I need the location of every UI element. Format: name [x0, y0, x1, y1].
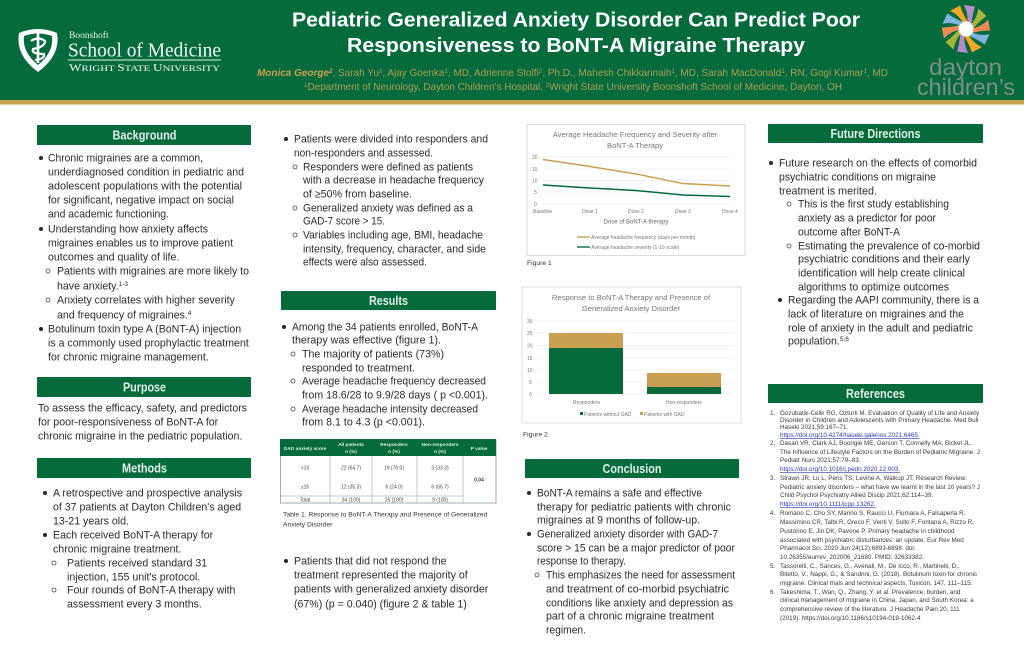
table 1: 6 (24.0)	[385, 484, 403, 490]
authors and affiliations: Wright State University Boonshoft School of Medicine, Dayton, OH	[549, 82, 842, 93]
text block: conclusion bullets: score > 15 can be a major predictor of poor	[537, 542, 735, 554]
chart: response stacked bar chart: 0	[529, 392, 532, 398]
table 1: 12 (35.3)	[341, 484, 361, 490]
text block: reference list: Tassorelli, C., Sances, G., Avenali, M., De Icco, R., Martinelli, D.,	[780, 563, 960, 570]
text block: reference list: Pediatric anxiety disorders – what have we learnt in the last 10 years? J	[780, 484, 980, 491]
text block: study design bullets: Generalized anxiety was defined as a	[303, 202, 473, 214]
text block: results bullets: from 8.1 to 4.3 (p <0.001).	[302, 416, 425, 428]
authors and affiliations: 1	[863, 68, 867, 75]
text block: future directions bullets: role of anxiety in the adult and pediatric	[788, 322, 974, 334]
chart: headache frequency and severity line chart: Average Headache Frequency and Severity after	[553, 130, 718, 139]
heading: references: References	[846, 387, 905, 401]
chart: headache frequency and severity line chart: Average headache frequency (days per month)	[591, 235, 696, 241]
text block: results bullets	[282, 322, 488, 428]
text block: purpose: chronic migraine in the pediatric population.	[38, 430, 242, 442]
chart: headache frequency and severity line chart: 20	[532, 155, 538, 161]
chart: headache frequency and severity line chart	[527, 124, 745, 256]
chart: response stacked bar chart: 30	[527, 319, 533, 325]
text block: background bullets: Patients with migraines are more likely to	[57, 266, 249, 278]
authors and affiliations	[257, 68, 888, 93]
text block: reference list: migraine: Clinical trials and technical aspects. Toxicon, 147, 111–115.	[780, 580, 973, 587]
authors and affiliations: , MD, Adrienne Stolfi	[448, 68, 539, 79]
text block: future directions bullets: 5,6	[840, 336, 849, 343]
logo: Boonshoft School of Medicine	[18, 29, 221, 74]
authors and affiliations: 1	[444, 68, 448, 75]
text block: methods bullets: injection, 155 unit's protocol.	[67, 572, 200, 584]
authors and affiliations: Department of Neurology, Dayton Children's Hospital,	[308, 82, 546, 93]
text block: background bullets: migraines enables us to improve patient	[48, 238, 233, 250]
text block: reference list: Bitetto, V., Nappi, G., & Sandrini, G. (2018). Botulinum toxin for chronic	[780, 571, 977, 578]
text block: methods bullets	[43, 488, 242, 610]
text block: study design bullets: with a decrease in headache frequency	[302, 174, 485, 186]
chart: headache frequency and severity line chart: Dose of BoNT-A therapy	[604, 220, 668, 226]
text block: reference list	[770, 410, 980, 622]
text block: future directions bullets: Estimating the prevalence of co-morbid	[798, 240, 980, 252]
text block: reference list: 4.	[770, 510, 776, 517]
text block: background bullets: adolescent populations with the potential	[48, 180, 242, 192]
text block: purpose	[38, 402, 247, 442]
logo: Dayton Children's: dayton	[929, 54, 1002, 80]
logo: Boonshoft School of Medicine: W RIGHT STATE U NIVERSITY	[69, 63, 220, 74]
panel: conclusion	[525, 459, 739, 636]
icon: shield	[18, 29, 58, 72]
text block: background bullets	[39, 152, 249, 364]
table 1: 6 (66.7)	[431, 484, 449, 490]
text block: future directions bullets: Future research on the effects of comorbid	[779, 158, 977, 170]
text block: future directions bullets: outcome after BoNT-A	[798, 226, 901, 238]
text block: results bullets: Average headache frequency decreased	[302, 376, 486, 388]
authors and affiliations: , Sarah Yu	[333, 68, 379, 79]
text block: reference list: Strawn JR, Lu L, Peris TS, Levine A, Walkup JT. Research Review:	[780, 475, 967, 482]
text block: reference list: comprehensive review of the literature. J Headache Pain 20, 111	[780, 606, 960, 613]
title: Responsiveness to BoNT-A Migraine Therapy	[347, 34, 806, 57]
heading: future directions: Future Directions	[830, 127, 921, 141]
text block: background bullets: is a commonly used prophylactic treatment	[48, 338, 249, 350]
panel: purpose	[37, 377, 251, 442]
text block: reference list: Haseki 2021;59:167–71.	[780, 424, 849, 431]
authors and affiliations: , MD	[867, 68, 888, 79]
text block: study design bullets: Patients were divided into responders and	[294, 134, 488, 146]
panel: references	[768, 384, 983, 622]
heading: results	[281, 291, 496, 310]
chart: headache frequency and severity line chart: 15	[532, 167, 538, 173]
text block: background bullets: for significant, negative impact on social	[48, 194, 234, 206]
text block: conclusion bullets: response to therapy.	[537, 556, 626, 568]
text block: reference list: clinical management of migraine in China, Japan, and South Korea: a	[780, 597, 974, 604]
heading: conclusion	[525, 459, 739, 478]
logo: Boonshoft School of Medicine: School of Medicine	[68, 40, 221, 62]
table 1: 9 (100)	[432, 498, 448, 504]
chart: headache frequency and severity line chart: Dose 3	[675, 209, 691, 215]
text block: background bullets: Botulinum toxin type A (BoNT-A) injection	[48, 324, 241, 336]
authors and affiliations: , Ph.D., Mahesh Chikkannaih	[542, 68, 672, 79]
text block: reference list: associated with psychiatric disturbances: an update. Eur Rev Med	[780, 537, 964, 544]
text block: study design bullets: Responders were defined as patients	[303, 162, 473, 174]
chart: headache frequency and severity line chart: 5	[534, 190, 537, 196]
chart: response stacked bar chart: Patients with GAD	[644, 412, 685, 418]
text block: methods bullets: Patients received standard 31	[67, 558, 207, 570]
chart: response stacked bar chart: 10	[527, 368, 533, 374]
text block: reference list: 3.	[770, 475, 776, 482]
authors and affiliations: 2	[328, 68, 333, 75]
text block: non-responder finding: patients with generalized anxiety disorder	[294, 584, 489, 596]
text block: background bullets: Chronic migraines are a common,	[48, 152, 203, 164]
heading: results: Results	[369, 294, 408, 308]
text block: reference list: Child Psychol Psychiatry Allied Discip 2021;62:114–39.	[780, 492, 933, 499]
chart: headache frequency and severity line chart: Average headache severity (1-10 scale)	[591, 245, 680, 251]
chart: headache frequency and severity line chart: 10	[532, 178, 538, 184]
authors and affiliations: 2	[539, 68, 543, 75]
text block: study design bullets: GAD-7 score > 15.	[303, 216, 385, 228]
authors and affiliations: 1	[304, 82, 308, 89]
chart: response stacked bar chart: Responders	[573, 400, 600, 406]
text block: non-responder finding: (67%) (p = 0.040) (figure 2 & table 1)	[294, 598, 467, 610]
text block: reference list: 2.	[770, 440, 776, 447]
text block: reference list: 6.	[770, 589, 776, 596]
title: Pediatric Generalized Anxiety Disorder Can Predict Poor	[292, 8, 860, 32]
text block: methods bullets: A retrospective and prospective analysis	[53, 488, 242, 500]
text block: future directions bullets: anxiety as a predictor for poor	[798, 212, 936, 224]
text block: future directions bullets: identification will help create clinical	[798, 268, 965, 280]
text block: reference list: Massimino CR, Talbi R, Greco F, Venti V, Sullo F, Fontana A, Rizzo R,	[780, 519, 974, 526]
logo: Dayton Children's: children’s	[917, 74, 1015, 100]
text block: study design bullets: of ≥50% from baseline.	[303, 188, 412, 200]
heading: methods: Methods	[122, 462, 167, 476]
text block: reference list: https://doi.org/10.1111/jcpp.13262.	[780, 501, 876, 508]
text block: background bullets: 4	[188, 310, 192, 317]
text block: non-responder finding: treatment represented the majority of	[294, 570, 468, 582]
text block: results bullets: therapy was effective (figure 1).	[292, 334, 441, 346]
table 1: n (%)	[388, 449, 400, 455]
text block: future directions bullets: This is the first study establishing	[798, 198, 949, 210]
heading: purpose	[37, 377, 251, 397]
text block: future directions bullets	[769, 158, 980, 348]
text block: conclusion bullets: Generalized anxiety disorder with GAD-7	[537, 528, 718, 540]
panel: results	[280, 291, 496, 610]
authors and affiliations: 1	[781, 68, 785, 75]
table 1: 22 (64.7)	[341, 466, 361, 472]
table 1: 34 (100)	[342, 498, 361, 504]
chart: headache frequency and severity line chart: 0	[534, 202, 537, 208]
chart: headache frequency and severity line chart: Dose 1	[582, 209, 598, 215]
text block: future directions bullets: algorithms to optimize outcomes	[798, 282, 949, 294]
authors and affiliations: Monica George	[257, 68, 329, 79]
text block: methods bullets: Four rounds of BoNT-A therapy with	[67, 584, 236, 596]
text block: reference list: (2019). https://doi.org/10.1186/s10194-019-1062-4	[780, 615, 921, 622]
figure 1 caption: Figure 1	[527, 260, 552, 267]
chart: response stacked bar chart: Response to BoNT-A Therapy and Presence of	[552, 293, 711, 302]
text block: background bullets: have anxiety.	[57, 280, 119, 292]
chart: response stacked bar chart: 25	[527, 331, 533, 337]
text block: future directions bullets: Regarding the AAPI community, there is a	[788, 294, 979, 306]
authors and affiliations: 2	[546, 82, 550, 89]
text block: results bullets: The majority of patients (73%)	[302, 348, 444, 360]
table 1: GAD anxiety score	[284, 446, 327, 452]
text block: future directions bullets: population.	[788, 336, 840, 348]
text block: study design bullets	[284, 134, 488, 268]
panel: methods	[37, 458, 251, 610]
chart: headache frequency and severity line chart: Baseline	[533, 209, 552, 215]
panel: background	[37, 125, 251, 364]
text block: non-responder finding: Patients that did not respond the	[294, 556, 447, 568]
text block: reference list: 1.	[770, 410, 776, 417]
chart: response stacked bar chart: 15	[527, 356, 533, 362]
authors and affiliations: , Ajay Goenka	[382, 68, 445, 79]
figure 2 caption: Figure 2	[523, 432, 548, 438]
text block: conclusion bullets: This emphasizes the need for assessment	[546, 570, 735, 582]
table 1: Non-responders	[421, 442, 459, 448]
text block: methods bullets: of 37 patients at Dayton Children's aged	[53, 502, 241, 514]
text block: results bullets: responded to treatment.	[302, 362, 415, 374]
heading: purpose: Purpose	[123, 380, 166, 394]
table 1: Responders	[380, 442, 408, 448]
text block: study design bullets: non-responders and assessed.	[294, 148, 433, 160]
text block: future directions bullets: lack of literature on migraines and the	[788, 308, 964, 320]
table 1: <15	[301, 466, 309, 472]
text block: methods bullets: chronic migraine treatment.	[53, 544, 181, 556]
authors and affiliations: , MD, Sarah MacDonald	[675, 68, 782, 79]
text block: background bullets: outcomes and quality of life.	[48, 252, 179, 264]
table 1: ≥15	[301, 484, 309, 490]
authors and affiliations: , RN, Gogi Kumar	[785, 68, 864, 79]
table 1: Total	[300, 498, 310, 504]
text block: methods bullets: 13-21 years old.	[53, 516, 129, 528]
authors and affiliations: 2	[379, 68, 383, 75]
chart: headache frequency and severity line chart: Dose 2	[628, 209, 644, 215]
logo: Dayton Children's	[917, 1, 1015, 100]
text block: reference list: Pharmacol Sci. 2020 Jun;24(12):6893-6898. doi:	[780, 545, 916, 552]
table 1: 0.04	[474, 478, 484, 484]
text block: background bullets: 1-3	[119, 281, 128, 288]
text block: study design bullets: intensity, frequency, character, and side	[303, 244, 486, 256]
text block: non-responder finding	[284, 556, 489, 610]
icon: pinwheel	[939, 1, 993, 57]
table 1: 25 (100)	[385, 498, 404, 504]
table caption	[283, 512, 488, 528]
text block: future directions bullets: psychiatric conditions and their early	[798, 254, 971, 266]
chart: response stacked bar chart: 20	[527, 344, 533, 350]
table 1: n (%)	[345, 449, 357, 455]
text block: study design bullets: effects were also assessed.	[303, 256, 427, 268]
text block: reference list: Takeshima, T., Wan, Q., Zhang, Y. et al. Prevalence, burden, and	[780, 589, 961, 596]
table 1: P value	[471, 446, 488, 452]
text block: study design bullets: Variables including age, BMI, headache	[303, 230, 483, 242]
text block: reference list: 5.	[770, 563, 776, 570]
text block: conclusion bullets: regimen.	[546, 624, 586, 636]
table 1: All patients	[338, 442, 364, 448]
text block: conclusion bullets: therapy for pediatric patients with chronic	[537, 502, 732, 514]
text block: purpose: To assess the efficacy, safety, and predictors	[38, 402, 247, 414]
text block: future directions bullets: treatment is merited.	[779, 186, 877, 198]
text block: methods bullets: Each received BoNT-A therapy for	[53, 530, 214, 542]
text block: conclusion bullets	[527, 488, 735, 636]
table 1: 19 (76.0)	[384, 466, 404, 472]
chart: response stacked bar chart: Patients without GAD	[584, 412, 632, 418]
text block: background bullets: and frequency of migraines.	[57, 310, 188, 322]
text block: conclusion bullets: part of a chronic migraine treatment	[546, 610, 714, 622]
text block: reference list: 10.26355/eurrev_202006_21680. PMID: 32633382.	[780, 554, 924, 561]
table caption: Table 1. Response to BoNT-A Therapy and Presence of Generalized	[283, 512, 488, 518]
chart: headache frequency and severity line chart: Dose 4	[722, 209, 738, 215]
text block: background bullets: Understanding how anxiety affects	[48, 224, 208, 236]
text block: methods bullets: assessment every 3 months.	[67, 598, 202, 610]
text block: conclusion bullets: and treatment of co-morbid psychiatric	[546, 584, 730, 596]
text block: reference list: Pustorino E, Jin DK, Pavone P. Primary headache in childhood	[780, 528, 955, 535]
chart: response stacked bar chart: Non-responders	[666, 400, 702, 406]
text block: reference list: Pediatr Nurs 2021;57:79–83.	[780, 457, 861, 464]
authors and affiliations: 1	[671, 68, 675, 75]
text block: background bullets: Anxiety correlates with higher severity	[57, 294, 236, 306]
text block: results bullets: from 18.6/28 to 9.9/28 days ( p <0.001).	[302, 390, 488, 402]
text block: background bullets: underdiagnosed condition in pediatric and	[48, 166, 244, 178]
text block: future directions bullets: psychiatric conditions on migraine	[779, 172, 936, 184]
table 1	[280, 439, 496, 504]
panel: future directions	[768, 124, 983, 348]
text block: purpose: for poor-responsiveness of BoNT-A for	[38, 416, 219, 428]
heading: references	[768, 384, 983, 403]
text block: reference list: Disorder in Children and Adolescents with Primary Headache. Med Bull	[780, 417, 978, 424]
heading: background	[37, 125, 251, 145]
text block: conclusion bullets: BoNT-A remains a safe and effective	[537, 488, 702, 500]
title	[292, 8, 860, 57]
table caption: Anxiety Disorder	[283, 522, 333, 528]
table 1: 3 (33.3)	[431, 466, 449, 472]
text block: reference list: The Influence of Lifestyle Factors on the Burden of Pediatric Migraine. J	[780, 449, 980, 456]
text block: reference list: Dasari VR, Clark AJ, Boorigie ME, Gerson T, Connelly MA, Bickel JL.	[780, 440, 972, 447]
chart: response stacked bar chart: 5	[529, 380, 532, 386]
text block: results bullets: Average headache intensity decreased	[302, 404, 478, 416]
text block: conclusion bullets: conditions like anxiety and depression as	[546, 598, 733, 610]
text block: reference list: https://doi.org/10.1016/j.pedn.2020.12.003.	[780, 466, 900, 473]
chart: response stacked bar chart	[522, 287, 741, 423]
chart: response stacked bar chart: Generalized Anxiety Disorder	[582, 304, 681, 313]
chart: headache frequency and severity line chart: BoNT-A Therapy	[607, 141, 663, 150]
table 1: n (%)	[434, 449, 446, 455]
logo: Boonshoft School of Medicine: Boonshoft	[69, 30, 109, 41]
text block: conclusion bullets: migraines at 9 months of follow-up.	[537, 514, 700, 526]
heading: background: Background	[112, 128, 176, 142]
heading: methods	[37, 458, 251, 478]
header banner	[0, 0, 1024, 104]
text block: reference list: https://doi.org/10.4274/haseki.galenos.2021.6465.	[780, 432, 920, 439]
text block: results bullets: Among the 34 patients enrolled, BoNT-A	[292, 322, 479, 334]
heading: future directions	[768, 124, 983, 143]
heading: conclusion: Conclusion	[602, 462, 662, 476]
text block: reference list: Romano C, Cho SY, Marino S, Raucci U, Fiumara A, Falsaperla R,	[780, 510, 966, 517]
text block: background bullets: and academic functioning.	[48, 208, 169, 220]
text block: background bullets: for chronic migraine management.	[48, 352, 209, 364]
text block: reference list: Gozubatik-Celik RG, Ozturk M. Evaluation of Quality of Life and Anxiety	[780, 410, 980, 417]
